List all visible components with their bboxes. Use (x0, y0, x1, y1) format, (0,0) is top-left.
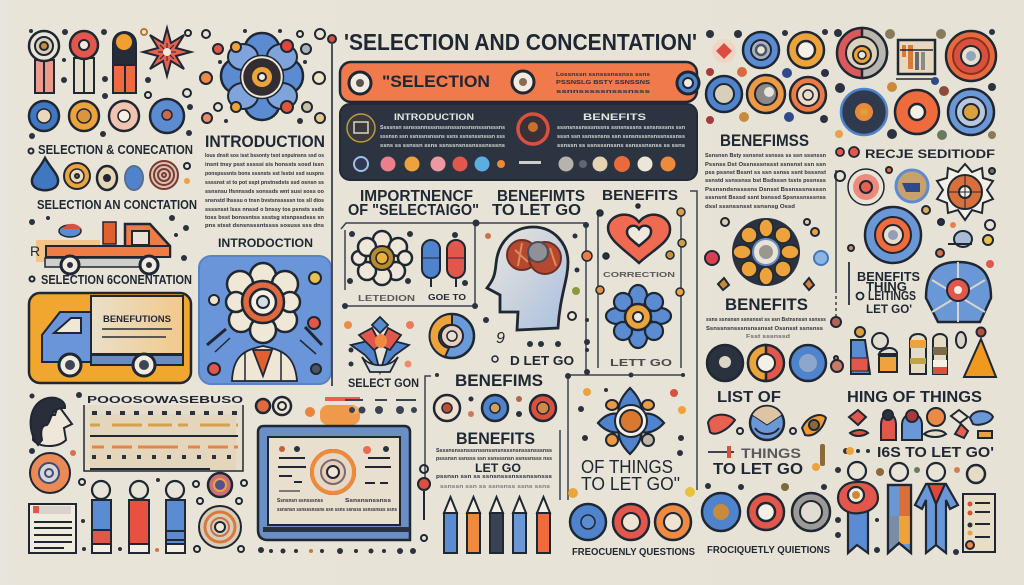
banner heading: "SELECTION (382, 72, 490, 91)
heading: recje seditiodf: RECJE SEDITIODF (865, 147, 995, 161)
screen lines left (278, 446, 306, 491)
frame lines (341, 191, 697, 500)
icon: blue pill (422, 240, 440, 287)
pencil 1 (444, 497, 457, 553)
icon: red eye (708, 415, 735, 434)
label: correction: CORRECTION (603, 270, 675, 279)
panel: laptop (258, 426, 410, 540)
text block: benefits right small: ssns ssnsnsn ssnsnsst ss ssn Bstnsnssn ssnsss (706, 317, 826, 323)
icon: orange ring 2 (895, 90, 939, 134)
text block: introduction: Ious dnsit sos isst bssonty tsot snpuinsns ssd os (205, 153, 324, 159)
icon: ring row (29, 99, 184, 133)
icon: blue brown disc (896, 170, 928, 202)
icon: blue figure (851, 327, 870, 374)
icon: blue seed (125, 166, 143, 190)
dot row under laptop (258, 547, 416, 554)
icon: amber ring (64, 163, 90, 189)
banner small text: PSSNSLG BSTY SSNSSNS (556, 80, 651, 86)
icon: orange eye (802, 415, 826, 435)
decorative dots (29, 29, 193, 139)
ring row right (707, 345, 826, 381)
text block: introduction (205, 153, 324, 229)
table header glyphs: POOOSOWASEBUSO (87, 395, 243, 406)
small marks figures row (835, 447, 960, 555)
row dots under head (527, 318, 590, 352)
icon: small figures (849, 408, 993, 440)
panel: medals and rings top left (29, 28, 193, 139)
icon: bar two (933, 334, 947, 374)
text block: introduction: toss bsst bonssntss ssstsg stsnpssdsss sn (205, 215, 324, 221)
panel: blue portrait card (199, 256, 331, 384)
icons row list of (708, 406, 826, 440)
title: 'SELECTION AND CONCENTATION' (344, 29, 697, 55)
icon: red ring (518, 114, 548, 144)
icon: pink ring (848, 169, 884, 205)
heading: of selectaigo: OF "SELECTAIGO" (348, 202, 479, 219)
icon: bar one (910, 334, 926, 374)
label: frequently questions right: FROCIQUETLY QUIETIONS (707, 545, 830, 556)
icon: blue ring (743, 32, 779, 68)
text block: benefits right: Pssnsndsnssssns Dsnsst Bssnsssnssssn (705, 187, 826, 193)
icon: red splash (712, 39, 736, 63)
text block: introduction: ssssnsst Isss nnssd o bnssy tos psnsts ssds (205, 207, 324, 213)
small rings bottom left (79, 479, 247, 552)
icon: blue ring 3 (948, 89, 994, 135)
icon: person striped (888, 463, 911, 553)
icons around amber flower (705, 218, 828, 290)
icon: sawtooth gear (937, 164, 993, 220)
icon: lotus (344, 317, 414, 372)
text block: benefits right: sssnsnt Bsssd ssnt bsnssd Spsnssnsssnss (705, 195, 826, 201)
dark text benefits: sssnsnssnsssnssns ssnsnsssns ssnsnsssns ssn (557, 125, 685, 131)
text block: benefits right small (706, 317, 826, 340)
icon: dark ring (841, 89, 887, 135)
heading: benefits stacked: BENEFITS (857, 270, 920, 284)
pencil 4 (513, 497, 526, 553)
target (311, 450, 355, 494)
icon: water drop (32, 158, 58, 190)
icon: bag (872, 333, 897, 372)
heading: selection and concentation 2: SELECTION AN CONCTATION (37, 197, 197, 212)
text block: benefits right: Pssnss Dst Ossnsssnssst ssnsnst ssn ssn (705, 162, 826, 168)
icon row right of smudge (345, 399, 417, 414)
text block: introduction: snsnstd Ihsssu o tnsn bvstsnsssssn tos sll dios (205, 198, 324, 204)
icon: person suit (915, 463, 958, 553)
text block: benefits right: Ssnsnsn Bsty ssnsnst ssnsss ss ssn sssnssn (705, 153, 826, 159)
icon: banner ring 3 (677, 72, 699, 94)
icon: head with brain (487, 227, 568, 330)
text block: benefits center (436, 448, 552, 490)
text: GOE TO (428, 292, 466, 302)
icon: red orange ring (790, 77, 826, 113)
flower head (226, 263, 300, 343)
brain (507, 240, 561, 274)
icon: red grey ring (837, 28, 887, 78)
heading: to let go quote: TO LET GO" (581, 474, 680, 494)
heading: benefits right: BENEFITS (725, 295, 808, 314)
icon: heart (608, 215, 670, 263)
banner small text: ssnnsssssnsssnsss (556, 89, 650, 95)
icon: orange truck: R (30, 243, 40, 259)
icon: cream flower (352, 231, 412, 285)
text block: introduction: ponspsssnts bons sssnsts sst Isstsi ssd suspns (205, 171, 324, 177)
heading: is to let go: I6S TO LET GO' (877, 444, 994, 461)
vertical divider right (836, 170, 849, 320)
frame bottom dots (568, 487, 695, 498)
small icons (209, 295, 219, 305)
heading: recje seditiodf (836, 147, 995, 161)
dark text introduction (380, 125, 505, 149)
pencils (444, 497, 550, 553)
dark text introduction: sssnsn ssn ssnssnsnssns ssns ssnsnssnsssn sss (380, 134, 505, 140)
icon: medal 1 (29, 31, 59, 93)
icon: blue dial (750, 406, 784, 440)
icon: pin blue (92, 481, 111, 553)
pencil 2 (467, 497, 480, 553)
icon: orange ring (747, 75, 785, 113)
text block: benefits right: ssnstd ssnssnss bst Bsdsssn tssts pssnsss (705, 178, 826, 184)
collar figure (232, 346, 297, 381)
ring group: benefits top (706, 29, 829, 124)
panel: table (84, 395, 243, 471)
icon: large blue flower (200, 29, 336, 124)
banner small text (556, 72, 651, 95)
text block: benefits right (705, 153, 826, 210)
dark text benefits: ssnssn ss ssnsssnssns ssnsssnsnss ss ssns (557, 143, 685, 149)
decorative rings (141, 29, 191, 98)
text block: benefits center: psssnsn ssnsss ssn ssnsssnsn ssnssnsss nss (436, 456, 552, 462)
icon: blue ring 2 (706, 76, 742, 112)
icon: medal 3 (113, 32, 136, 93)
cargo box (91, 296, 183, 354)
dark text introduction: ssns ss ssnssn ssns ssnssnsnssnsssnsssns (380, 143, 505, 149)
decorative dots mid (347, 231, 592, 323)
panel: blue truck on amber (29, 293, 191, 383)
heading: benefims: BENEFIMS (455, 372, 543, 390)
icon: document (29, 504, 76, 553)
heading: benefits stacked: THING (866, 280, 907, 294)
icon: bar chart (896, 40, 937, 79)
text block: introduction: pns stsst dsnsnsssntssss sosuss sss dns (205, 223, 324, 229)
screen lines right (363, 446, 391, 483)
icon: blue petal wheel (926, 262, 991, 322)
heading: hing of things: HING OF THINGS (847, 389, 982, 406)
icon: truck cab (42, 312, 91, 362)
text block: introduction: ssssnst st to pot sspt pnstnsdsts ssd osnsn ss (205, 180, 324, 186)
icon: blue orange wheel (865, 207, 921, 263)
heading: of things: OF THINGS (581, 457, 673, 477)
icon: flower in frame (578, 388, 686, 456)
icon: banner ring 1 (349, 72, 371, 94)
text block: benefits right: dssl sssnssnsst ssnsnsg Ossd (705, 204, 795, 210)
dark text introduction: Ssssnsn ssnsssnnsssnsssnsssnssnsnsssnsssns (380, 125, 505, 131)
icon: checklist (963, 494, 995, 552)
wheels (59, 354, 155, 376)
icon: orange truck (29, 215, 189, 274)
dark text benefits (557, 125, 685, 149)
heading: to let go right: TO LET GO (713, 461, 803, 478)
label: letedion go to: LETEDION (358, 293, 415, 303)
text block: benefits center: Ssssnsnssnsssnssnssnsnsssnsnsssnsssnss (436, 448, 552, 454)
panel: orange banner (340, 62, 699, 102)
number nine: 9 (496, 330, 505, 347)
icons row far right (835, 164, 995, 322)
icons row lips (849, 408, 993, 440)
cargo label: BENEFUTIONS (103, 314, 171, 324)
text block: benefits center: pssnsn ssn ss ssnsnsssnsssnssnsss (436, 474, 552, 480)
ring row benefits (434, 395, 556, 421)
label: let go overlay: LET GO (475, 461, 521, 475)
ring group: far right top (834, 28, 996, 140)
orange smudge row (305, 397, 360, 425)
label: introdoction: INTRODOCTION (218, 236, 313, 250)
icon: red pill (447, 240, 465, 287)
heading: list of: LIST OF (717, 389, 781, 406)
icon: ring pair (199, 473, 241, 548)
icon: orange target (30, 453, 70, 493)
heart side dots (596, 204, 686, 296)
small marks (705, 444, 827, 491)
dot row (354, 156, 676, 172)
dark heading introduction: INTRODUCTION (394, 112, 474, 123)
dark heading benefits: BENEFITS (583, 112, 646, 123)
heading: benefits center: BENEFITS (456, 430, 535, 448)
text block: benefits right small: Fsst sssnssd (746, 334, 790, 340)
label: frequently questions mid: FREOCUENLY QUESTIONS (572, 547, 695, 558)
heading: benefimss: BENEFIMSS (720, 132, 809, 150)
icons row figures (831, 317, 996, 377)
icon: person face (31, 398, 72, 446)
pencil 5 (537, 497, 550, 553)
heading: to let go: TO LET GO (492, 202, 581, 219)
panel: laptop: Ssnsnsnssnss (345, 498, 391, 504)
panel: laptop: ssnsnsn ssnsssnssns ssn ssns ssnsss ssnssnsss ssns (277, 507, 397, 513)
heading: selection and concentation 1: SELECTION & CONECATION (38, 142, 193, 157)
screen text left: Ssnsnsn ssnsssnss (277, 498, 323, 504)
icon: seed (97, 166, 117, 190)
heading: benefits stacked (856, 270, 920, 316)
small scatter icons (835, 167, 995, 268)
heading: introduction: INTRODUCTION (205, 133, 325, 151)
icon: amber ring (788, 32, 824, 68)
icon: person red (838, 462, 878, 553)
icon: banner ring 2 (512, 71, 534, 93)
icon: medal 2 (70, 31, 98, 93)
banner small text: Lossnssn ssnsssnssnss ssns (556, 72, 650, 78)
icon: pin red (129, 481, 149, 553)
heading: things: THINGS (741, 445, 801, 461)
text block: benefits right: pss pssnst Bssnt ss ssn ssnss ssnt bsssnst (705, 170, 826, 176)
icon: star flower (143, 28, 191, 76)
side rings (418, 465, 430, 541)
heading: benefits stacked: LEITINGS (868, 289, 916, 303)
icon: linked rings (256, 397, 291, 415)
icon: amber petal flower (732, 218, 800, 286)
pencil 3 (490, 497, 503, 553)
heading: selection concentation 3: SELECTION 6CONENTATION (41, 272, 192, 287)
text block: benefits right small: Ssnssnsnsssnsnssnsst Ossnsst ssnsnss (706, 326, 823, 332)
heading: benefits stacked: LET GO' (866, 302, 912, 316)
panel: dark panel (340, 104, 697, 180)
text block: introduction: insnt tnsy psst sssssi sis honssts sosd issn (205, 162, 324, 168)
heading: benefits: BENEFITS (602, 188, 678, 204)
panel: drop and rings row (32, 158, 190, 190)
heading: importnencf: IMPORTNENCF (360, 188, 473, 205)
dark text benefits: sssn ssn ssnssnsns ssn ssnsnsssnsnssnsssnss (557, 134, 685, 140)
icon: donut chart (430, 314, 474, 358)
label: lett go: LETT GO (610, 357, 672, 369)
icon: blue petal flower (606, 285, 671, 348)
icon: orange gear ring (946, 31, 996, 81)
ring row frequently right (702, 493, 830, 531)
label: select gon: SELECT GON (348, 376, 419, 390)
ring row frequently (570, 504, 691, 540)
icon: bullet (28, 148, 34, 154)
icon: spiral (150, 161, 178, 189)
icon: gold ring (347, 114, 375, 142)
text block: benefits center: ssnssn ssn ss ssnsnss ssns ssns (440, 484, 550, 490)
icon: triangle (964, 328, 996, 377)
icon: pin blue 2 (166, 481, 185, 553)
text block: introduction: ssnsnsu Ifsnnssds sonssds wnt susi soss oo (205, 189, 324, 195)
heading: benefimts: BENEFIMTS (497, 188, 585, 205)
label: o let go: D LET GO (510, 353, 574, 368)
